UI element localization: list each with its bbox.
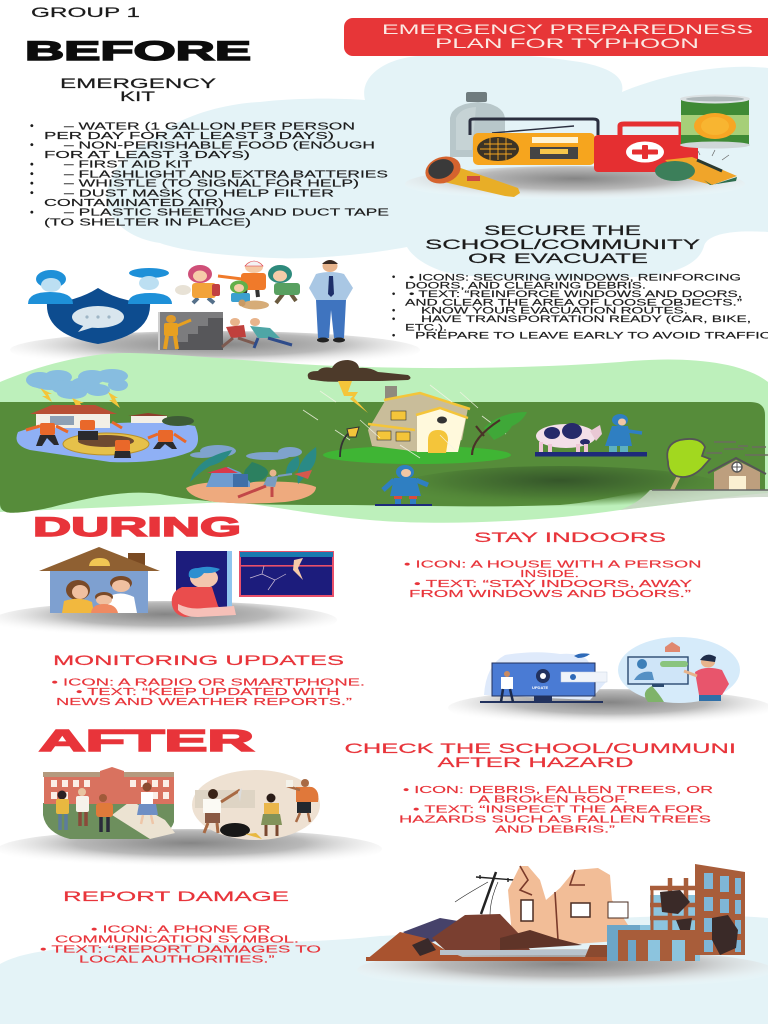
icon: bent tree [472, 412, 527, 455]
heading: stay indoors: STAY INDOORS [474, 529, 666, 545]
illustration: updates on screens [448, 637, 768, 727]
text block: stay indoors: INSIDE. [520, 568, 579, 580]
icon: monitor with update [480, 652, 607, 703]
icon: police officer [309, 260, 353, 342]
title banner: EMERGENCY PREPAREDNESS [382, 21, 753, 37]
text block: stay indoors: • ICON: A HOUSE WITH A PERSON [404, 558, 702, 570]
text block: monitoring updates: NEWS AND WEATHER REPORTS.” [56, 696, 353, 708]
heading: secure the school/community or evacuate [425, 222, 701, 266]
text block: emergency kit list: – FLASHLIGHT AND EXTRA BATTERIES [64, 168, 388, 180]
icon: whistle [655, 150, 737, 185]
icon: first aid kit [594, 124, 698, 172]
text block: check the school: • TEXT: “INSPECT THE AREA FOR [413, 804, 704, 816]
text block: check the school: A BROKEN ROOF. [478, 794, 628, 806]
text block: stay indoors: • TEXT: “STAY INDOORS, AWAY [414, 578, 692, 590]
background cloud: lower [0, 916, 768, 1024]
icon: dark thundercloud [308, 360, 410, 382]
label: group 1: GROUP 1 [31, 4, 140, 20]
scene: house in storm [303, 360, 527, 464]
text block: emergency kit list: – NON-PERISHABLE FOOD (ENOUGH [64, 139, 375, 151]
text block: monitoring updates: • ICON: A RADIO OR SMARTPHONE. [52, 676, 365, 688]
text block: secure list: • ICONS: SECURING WINDOWS, REINFORCING [409, 271, 741, 282]
text block: emergency kit list: • [30, 139, 34, 151]
text block: secure list: DOORS, AND CLEARING DEBRIS. [405, 280, 646, 291]
heading: after: AFTER [39, 723, 254, 758]
panel: typhoon landscape [0, 353, 768, 523]
icon: video call circle [618, 637, 740, 703]
icon: collapsed shed and rubble [366, 914, 607, 961]
icon: broken window [240, 552, 333, 596]
text block: emergency kit list: – WATER (1 GALLON PER PERSON [64, 120, 355, 132]
text block: emergency kit list: CONTAMINATED AIR) [44, 197, 224, 209]
text block: emergency kit list: – PLASTIC SHEETING AND DUCT TAPE [64, 207, 389, 219]
icon: ruined house [508, 866, 632, 945]
heading: before: BEFORE [25, 36, 251, 66]
heading: emergency kit [60, 75, 217, 104]
heading: secure the school/community or evacuate: OR EVACUATE [468, 250, 648, 266]
icon: flashlight [422, 152, 520, 197]
icon: raincoat person [375, 465, 432, 506]
text block: secure list: • [392, 330, 395, 341]
heading: check the school: CHECK THE SCHOOL/CUMMUNI [344, 740, 736, 756]
icon: rescuer at stairs [158, 312, 223, 350]
icon: radio [470, 119, 598, 165]
icon: street lamp [340, 427, 359, 457]
title banner [344, 18, 768, 56]
icon: blue person left [28, 270, 73, 304]
icon: running people [222, 318, 292, 348]
text block: report damage: LOCAL AUTHORITIES.” [79, 953, 275, 965]
text block: emergency kit list: • [30, 120, 34, 132]
text block: secure list: • TEXT: “REINFORCE WINDOWS AND DOORS, [409, 288, 742, 299]
text block: emergency kit list: • [30, 206, 34, 218]
text block: emergency kit list: • [30, 187, 34, 199]
icon: man at door [172, 551, 236, 617]
text block: secure list: ETC.). [405, 321, 447, 332]
heading: check the school [344, 740, 736, 770]
text block: emergency kit list: – FIRST AID KIT [64, 159, 193, 171]
text block: check the school: HAZARDS SUCH AS FALLEN TREES [399, 814, 711, 826]
heading: monitoring updates: MONITORING UPDATES [53, 652, 344, 668]
text block: secure list [392, 271, 768, 341]
illustration: family and man at window [0, 547, 337, 639]
text block: check the school [399, 784, 714, 835]
text block: emergency kit list [30, 120, 389, 228]
text block: secure list: KNOW YOUR EVACUATION ROUTES. [421, 305, 688, 316]
icon: tree and small house in wind [652, 439, 768, 490]
text block: emergency kit list: • [30, 178, 34, 190]
text block: emergency kit list: • [30, 158, 34, 170]
text block: report damage: COMMUNICATION SYMBOL. [55, 933, 299, 945]
text block: check the school: • ICON: DEBRIS, FALLEN TREES, OR [403, 784, 714, 796]
text block: secure list: • [392, 313, 395, 324]
text block: report damage: • TEXT: “REPORT DAMAGES TO [40, 943, 321, 955]
text block: emergency kit list: FOR AT LEAST 3 DAYS) [44, 149, 250, 161]
icon: lightning bolt [338, 381, 368, 413]
icon: bombed tower block [607, 864, 745, 961]
heading: emergency kit: EMERGENCY [60, 75, 217, 91]
heading: report damage: REPORT DAMAGE [63, 888, 289, 904]
title banner: PLAN FOR TYPHOON [435, 35, 699, 51]
icon: family evacuating [175, 261, 300, 310]
icon: security shield [47, 288, 150, 344]
heading: secure the school/community or evacuate: SECURE THE [484, 222, 641, 238]
text block: secure list: • [392, 288, 395, 299]
text block: emergency kit list: • [30, 168, 34, 180]
icon: cow and person in flood [535, 414, 647, 456]
icon: water jug [450, 92, 505, 157]
text block: report damage [40, 924, 321, 965]
text block: emergency kit list: – DUST MASK (TO HELP FILTER [64, 187, 335, 199]
text block: secure list: PREPARE TO LEAVE EARLY TO AVOID TRAFFIC [415, 330, 768, 341]
icon: blue person right [128, 268, 172, 304]
text block: stay indoors: FROM WINDOWS AND DOORS.” [409, 588, 692, 600]
text block: emergency kit list: PER DAY FOR AT LEAST 3 DAYS) [44, 130, 334, 142]
icon: broken utility pole [455, 872, 514, 915]
text block: report damage: • ICON: A PHONE OR [91, 924, 271, 936]
text block: secure list: • [392, 271, 395, 282]
heading: during: DURING [33, 512, 241, 542]
text block: monitoring updates: • TEXT: “KEEP UPDATED WITH [76, 686, 340, 698]
illustration: ruined buildings [357, 864, 768, 991]
heading: secure the school/community or evacuate: SCHOOL/COMMUNITY [425, 236, 701, 252]
text block: emergency kit list: (TO SHELTER IN PLACE) [44, 216, 251, 228]
illustration: emergency kit items [405, 92, 750, 202]
scene: windy beach house [186, 445, 316, 504]
icon: school and students [43, 767, 175, 839]
storm shadow [390, 466, 730, 514]
icon: house with family [39, 547, 160, 613]
ground band [0, 402, 765, 513]
text block: emergency kit list: – WHISTLE (TO SIGNAL FOR HELP) [64, 178, 359, 190]
text block: secure list: • [392, 305, 395, 316]
text block: stay indoors [404, 558, 702, 600]
icon: monitor with update: UPDATE [532, 685, 548, 690]
illustration: evacuation group [10, 260, 420, 369]
icon: people clearing debris [192, 770, 320, 840]
icon: food can [680, 94, 750, 148]
heading: emergency kit: KIT [120, 88, 156, 104]
scene: flood rescue [16, 369, 198, 462]
icon: storm clouds [26, 369, 128, 399]
text block: secure list: HAVE TRANSPORTATION READY (CAR, BIKE, [421, 313, 751, 324]
heading: check the school: AFTER HAZARD [438, 754, 634, 770]
illustration: school inspection [0, 767, 382, 869]
text block: secure list: AND CLEAR THE AREA OF LOOSE OBJECTS.” [405, 296, 742, 307]
text block: monitoring updates [52, 676, 365, 708]
background cloud: upper [107, 54, 768, 279]
text block: check the school: AND DEBRIS.” [495, 823, 616, 835]
